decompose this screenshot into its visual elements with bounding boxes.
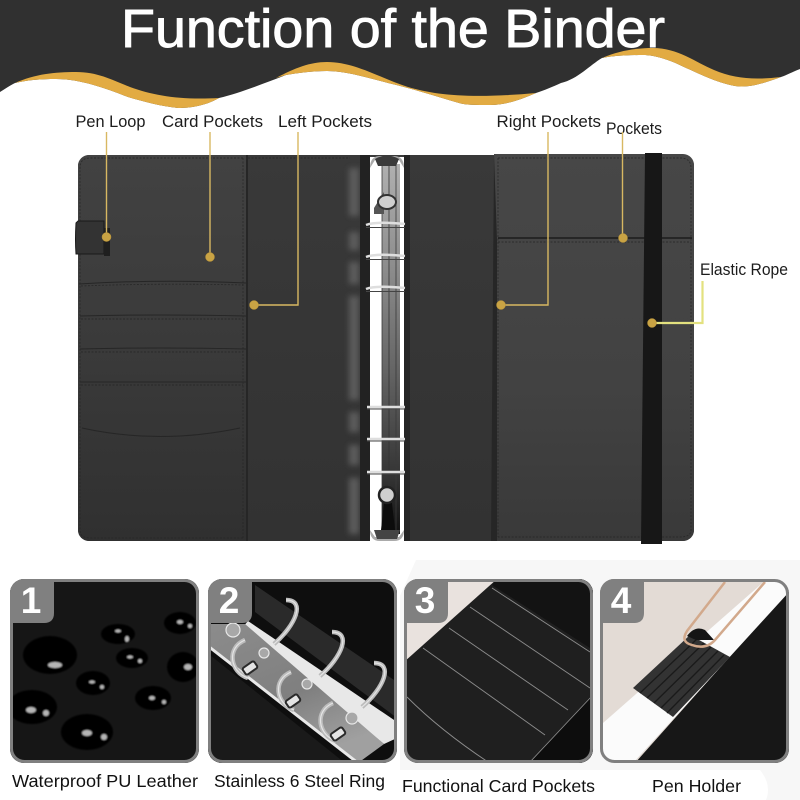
number badge 2: 2 — [219, 580, 239, 621]
callout: elastic rope: Elastic Rope — [700, 261, 788, 279]
number badge 2 — [208, 579, 252, 623]
header banner — [0, 0, 800, 108]
water droplets — [7, 612, 199, 750]
left cover with card pockets — [78, 155, 247, 541]
title: Function of the Binder — [121, 0, 665, 59]
panel 3: card pockets — [404, 579, 593, 763]
ring mechanism — [366, 156, 405, 541]
pen loop tab — [76, 221, 104, 254]
gold clip — [684, 582, 765, 647]
pocket stitching — [407, 588, 591, 762]
right cover with pocket — [491, 154, 694, 541]
callout: right pockets: Right Pockets — [496, 113, 601, 131]
right inner panel — [404, 155, 494, 541]
number badge 1 — [10, 579, 54, 623]
gold wave accent left — [15, 72, 219, 108]
callout: pen loop: Pen Loop — [76, 113, 146, 131]
gold wave accent middle — [276, 62, 536, 105]
metal bar — [208, 624, 384, 763]
callout: pen loop — [76, 113, 146, 242]
number badge 1: 1 — [21, 580, 41, 621]
callout: pockets: Pockets — [606, 120, 662, 138]
panel 2: steel rings — [208, 579, 397, 763]
callout: left pockets — [250, 113, 372, 310]
number badge 4: 4 — [611, 580, 632, 621]
callout: card pockets: Card Pockets — [162, 113, 263, 131]
open binder — [76, 153, 694, 544]
panel 4: pen holder — [600, 579, 789, 763]
panel 1: waterproof leather — [7, 579, 199, 763]
caption 3: Functional Card Pockets — [402, 776, 595, 796]
caption 1: Waterproof PU Leather — [12, 771, 198, 791]
binder strip — [242, 621, 397, 744]
left inner panel — [247, 155, 370, 541]
caption 4: Pen Holder — [652, 776, 741, 796]
callout: right pockets — [496, 113, 601, 310]
light backdrop behind panels 3 and 4 — [400, 560, 800, 800]
callout: pockets — [606, 120, 662, 242]
number badge 3 — [404, 579, 448, 623]
steel rings — [233, 600, 385, 741]
number badge 4 — [600, 579, 644, 623]
callout: left pockets: Left Pockets — [278, 113, 372, 131]
callout: elastic rope — [648, 261, 788, 328]
number badge 3: 3 — [415, 580, 435, 621]
elastic band — [641, 153, 662, 544]
gold wave accent right — [602, 48, 781, 87]
caption 2: Stainless 6 Steel Ring — [214, 771, 385, 791]
callout: card pockets — [162, 113, 263, 262]
pen — [603, 579, 789, 763]
elastic loop — [633, 628, 730, 717]
